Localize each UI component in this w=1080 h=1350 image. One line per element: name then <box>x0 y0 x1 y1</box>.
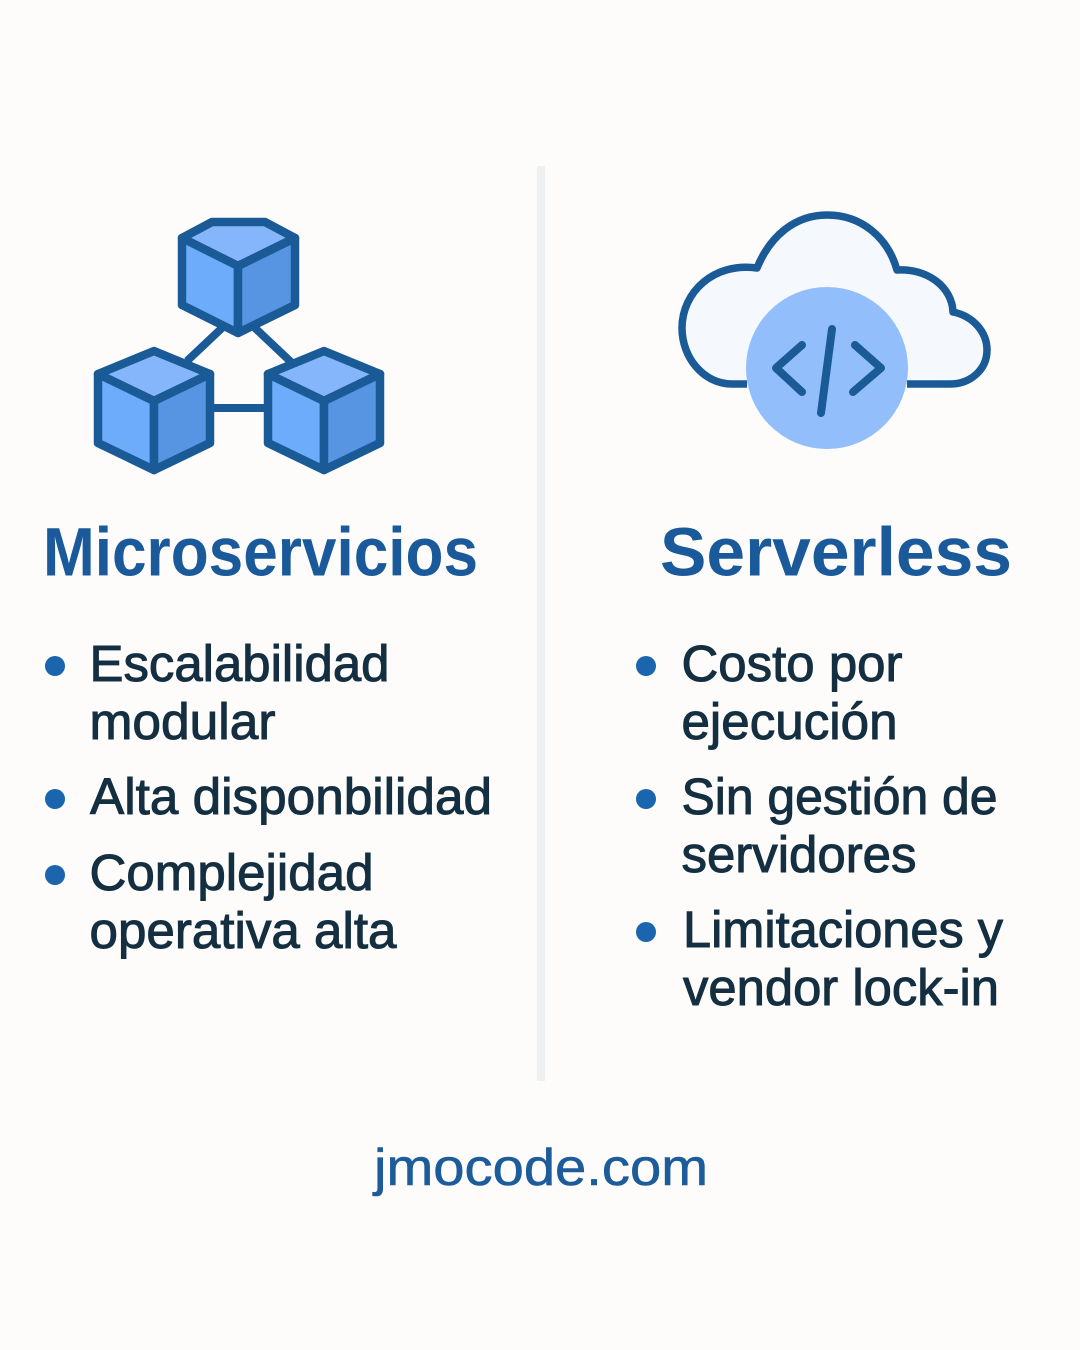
heading: Serverless: Serverless <box>660 514 1012 590</box>
icon: three connected cubes <box>98 222 380 470</box>
bullet item: Escalabilidad modular: modular <box>90 693 276 750</box>
bullet item: Costo por ejecución: ejecución <box>682 693 898 750</box>
panel: Serverless <box>636 215 1012 1016</box>
heading: Microservicios: Microservicios <box>43 514 478 590</box>
bullet item: Escalabilidad modular: Escalabilidad <box>90 635 390 692</box>
panel: Microservicios <box>43 222 492 959</box>
bullet item: Sin gestión de servidores: Sin gestión de <box>682 768 998 825</box>
bullet item: Sin gestión de servidores: servidores <box>682 826 916 883</box>
bullet item: Limitaciones y vendor lock-in: vendor lock-in <box>683 959 999 1016</box>
bullet item: Alta disponbilidad: Alta disponbilidad <box>90 768 492 825</box>
bullet item: Costo por ejecución: Costo por <box>682 635 903 692</box>
bullet item: Limitaciones y vendor lock-in: Limitaciones y <box>683 901 1003 958</box>
icon: cloud with code symbol <box>682 215 987 449</box>
footer: website: jmocode.com <box>372 1139 708 1197</box>
bullet item: Escalabilidad modular <box>45 635 390 750</box>
bullet item: Limitaciones y vendor lock-in <box>636 901 1003 1016</box>
bullet item: Costo por ejecución <box>636 635 903 750</box>
bullet item: Sin gestión de servidores <box>636 768 998 883</box>
bullet item: Complejidad operativa alta: Complejidad <box>90 844 374 901</box>
list: Microservicios features <box>45 635 492 959</box>
bullet item: Complejidad operativa alta: operativa alta <box>90 902 397 959</box>
list: Serverless features <box>636 635 1003 1016</box>
bullet item: Complejidad operativa alta <box>45 844 397 959</box>
